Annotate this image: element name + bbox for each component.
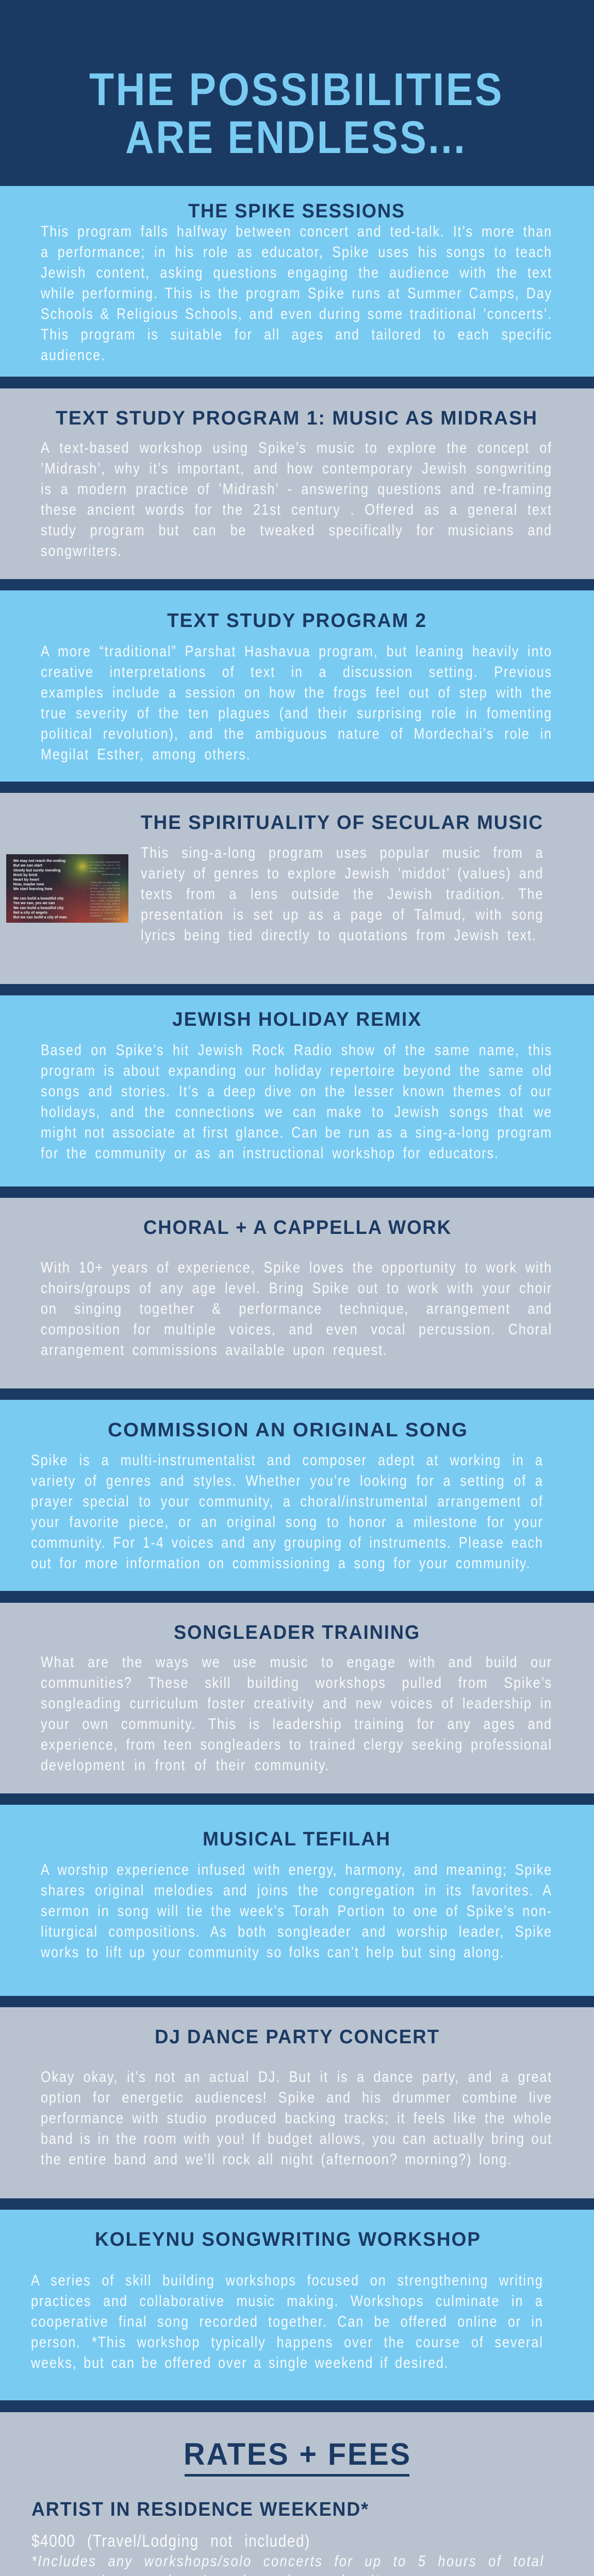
image: talmud-style slide with lyrics: heavens, so that we may (90, 908, 120, 911)
body text: experience, from teen songleaders to trained clergy seeking professional (41, 1736, 552, 1753)
image: talmud-style slide with lyrics: (Genesis 11:3-4) (103, 918, 120, 920)
body text: option for energetic audiences! Spike and his drummer combine live (41, 2089, 552, 2106)
body text: This program is suitable for all ages and tailored to each specific (41, 326, 552, 343)
image: talmud-style slide with lyrics: tower that reaches to the (90, 905, 120, 908)
subheading: artist in residence: ARTIST IN RESIDENCE WEEKEND* (31, 2499, 369, 2520)
title: THE POSSIBILITIES (89, 63, 504, 115)
heading: KOLEYNU SONGWRITING WORKSHOP (95, 2229, 481, 2250)
body text: A text-based workshop using Spike’s music to explore the concept of (41, 439, 552, 456)
image: talmud-style slide with lyrics: said, “Come, let us build (90, 899, 120, 902)
body text: study program but can be tweaked specifically for musicians and (41, 522, 552, 539)
heading: DJ DANCE PARTY CONCERT (155, 2026, 440, 2048)
body text: works to lift up your community so folks can’t help but sing along. (41, 1944, 505, 1961)
body text: might not associate at first glance. Can be run as a sing-a-long program (41, 1124, 552, 1141)
body text: shares original melodies and joins the congregation in its favorites. A (41, 1882, 552, 1899)
heading: MUSICAL TEFILAH (203, 1828, 391, 1850)
image: talmud-style slide with lyrics: Now, maybe now (13, 882, 44, 887)
body text: This program falls halfway between concert and ted-talk. It’s more than (41, 223, 552, 240)
header: title band (0, 0, 594, 186)
image: talmud-style slide with lyrics: We start learning how (13, 887, 53, 891)
body text: performance with studio produced backing tracks; it feels like the whole (41, 2110, 552, 2127)
panel: koleynu songwriting workshop (0, 2210, 594, 2400)
note: artist in residence: *Includes any workshops/solo concerts for up to 5 hours of total (31, 2553, 544, 2570)
image: talmud-style slide with lyrics: But we can start (13, 863, 43, 868)
heading: THE SPIRITUALITY OF SECULAR MUSIC (141, 812, 543, 834)
image: talmud-style slide with lyrics: “It is not your responsibility (90, 861, 120, 863)
panel: songleader training (0, 1603, 594, 1793)
body text (41, 1861, 552, 1961)
image: talmud-style slide with lyrics: Heart by heart (13, 877, 39, 882)
body text: lyrics being tied directly to quotations from Jewish text. (141, 927, 537, 944)
image: talmud-style slide with lyrics: Brick by brick (13, 872, 38, 877)
image: talmud-style slide with lyrics: Not a city of angels (13, 910, 47, 914)
body text: program is about expanding our holiday repertoire beyond the same old (41, 1062, 552, 1079)
heading: COMMISSION AN ORIGINAL SONG (108, 1419, 468, 1441)
body text: variety of genres to explore Jewish ’middot’ (values) and (141, 865, 543, 882)
panel: dj dance party concert (0, 2007, 594, 2198)
image: talmud-style slide with lyrics: ourselves a city, with a (90, 902, 120, 905)
body text: the entire band and we’ll rock all night (afternoon? morning?) long. (41, 2151, 512, 2168)
body text (31, 2272, 543, 2371)
body text: community. For 1-4 voices and any grouping of instruments. Please each (31, 1534, 543, 1551)
body text: variety of genres and styles. Whether you’re looking for a setting of a (31, 1472, 543, 1489)
body text: Schools & Religious Schools, and even during some traditional ’concerts’. (41, 306, 552, 323)
image: talmud-style slide with lyrics: neither are you free to (90, 867, 120, 869)
panel: text study program 2 (0, 590, 594, 782)
image: talmud-style slide with lyrics: make a name for (90, 911, 120, 914)
body text: Based on Spike’s hit Jewish Rock Radio show of the same name, this (41, 1042, 552, 1059)
body text: development in front of their community. (41, 1757, 329, 1774)
body text: person. *This workshop typically happens over the course of several (31, 2334, 543, 2351)
image: talmud-style slide with lyrics: tar for mortar. Then they (90, 896, 120, 899)
body text: band is in the room with you! If budget allows, you can actually bring out (41, 2130, 552, 2147)
body text: liturgical compositions. As both songleader and worship leader, Spike (41, 1923, 552, 1940)
body text (141, 844, 543, 944)
body text: Okay okay, it’s not an actual DJ. But it is a dance party, and a great (41, 2069, 552, 2086)
image: talmud-style slide with lyrics: bricks and bake them (90, 887, 120, 890)
body text: holidays, and the connections we can make to Jewish songs that we (41, 1104, 552, 1121)
body text: audience. (41, 347, 106, 364)
panel: text study program 1 (0, 388, 594, 579)
body text: for the community or as an instructional workshop for educators. (41, 1145, 499, 1162)
body text: prayer special to your community, a choral/instrumental arrangement of (31, 1493, 543, 1510)
body text (41, 1259, 552, 1359)
body text: true severity of the ten plagues (and their surprising role in fomenting (41, 705, 552, 722)
image: talmud-style slide with lyrics: But we can build a city of man (13, 915, 67, 920)
body text: out for more information on commissioning a song for your community. (31, 1555, 531, 1572)
body text: composition for multiple voices, and even vocal percussion. Choral (41, 1321, 552, 1338)
body text (41, 2069, 552, 2168)
image: talmud-style slide with lyrics: (Pirkei Avot 2:16) (102, 873, 121, 875)
image: talmud-style slide with lyrics: brick instead of stone, and (90, 893, 120, 896)
image: talmud-style slide with lyrics: We can build a beautiful city (13, 905, 64, 910)
body text: weeks, but can be offered over a single weekend if desired. (31, 2354, 449, 2371)
panel: commission an original song (0, 1400, 594, 1591)
body text: sermon in song will tie the week’s Torah Portion to one of Spike’s non- (41, 1903, 552, 1920)
body text: your own community. This is leadership training for any ages and (41, 1716, 552, 1733)
body text: A more “traditional” Parshat Hashavua program, but leaning heavily into (41, 643, 552, 660)
body text: communities? These skill building workshops pulled from Spike’s (41, 1674, 552, 1691)
heading: CHORAL + A CAPPELLA WORK (143, 1217, 452, 1239)
body text: ’Midrash’, why it’s important, and how contemporary Jewish songwriting (41, 460, 552, 477)
image: talmud-style slide with lyrics: thoroughly.” They used (90, 890, 120, 893)
body text (41, 223, 552, 364)
body text (41, 1654, 552, 1774)
price: artist in residence: $4000 (Travel/Lodging not included) (31, 2531, 310, 2550)
heading: SONGLEADER TRAINING (174, 1622, 420, 1643)
panel: rates + fees (0, 2412, 594, 2576)
body text: these ancient words for the 21st century . Offered as a general text (41, 501, 552, 518)
heading: JEWISH HOLIDAY REMIX (172, 1009, 422, 1030)
body text: examples include a session on how the frogs feel out of step with the (41, 684, 552, 701)
body text: choirs/groups of any age level. Bring Spike out to work with your choir (41, 1280, 552, 1297)
image: talmud-style slide with lyrics: “Come, let’s make (90, 884, 120, 887)
body text: arrangement commissions available upon request. (41, 1342, 388, 1359)
body text: creative interpretations of text in a discussion setting. Previous (41, 664, 552, 681)
body text (31, 1452, 543, 1572)
body text: songs and stories. It’s a deep dive on the lesser known themes of our (41, 1083, 552, 1100)
body text: your favorite piece, or an original song to honor a milestone for your (31, 1514, 543, 1531)
body text: cooperative final song recorded together. Can be offered online or in (31, 2313, 543, 2330)
image: talmud-style slide with lyrics: to finish the work, but (90, 864, 121, 867)
body text: political revolution), and the ambiguous nature of Mordechai’s role in (41, 725, 552, 742)
body text: Megilat Esther, among others. (41, 746, 251, 763)
image: talmud-style slide with lyrics: Slowly but surely mending (13, 868, 61, 872)
image: talmud-style slide with lyrics: desist from it.” (90, 870, 106, 872)
panel: the spirituality of secular music (0, 793, 594, 984)
body text: songleading curriculum foster creativity and new voices of leadership in (41, 1695, 552, 1712)
body text: while performing. This is the program Spike runs at Summer Camps, Day (41, 285, 552, 302)
image: talmud-style slide with lyrics: ourselves.” (90, 914, 103, 917)
body text (41, 643, 552, 763)
image: talmud-style slide with lyrics (6, 854, 128, 923)
heading: rates + fees: RATES + FEES (184, 2437, 411, 2471)
panel: the spike sessions (0, 186, 594, 377)
body text: texts from a lens outside the Jewish tradition. The (141, 886, 543, 903)
heading: TEXT STUDY PROGRAM 1: MUSIC AS MIDRASH (56, 408, 538, 429)
image: talmud-style slide with lyrics: Yes we can, yes we can (13, 901, 55, 905)
heading underline (185, 2474, 409, 2477)
body text: Jewish content, asking questions engaging the audience with the text (41, 264, 552, 281)
body text: presentation is set up as a page of Talmud, with song (141, 906, 543, 923)
panel: musical tefilah (0, 1805, 594, 1996)
body text: a performance; in his role as educator, Spike uses his songs to teach (41, 244, 552, 261)
body text: What are the ways we use music to engage with and build our (41, 1654, 552, 1671)
body text: With 10+ years of experience, Spike loves the opportunity to work with (41, 1259, 552, 1276)
body text (41, 1042, 552, 1162)
body text: This sing-a-long program uses popular music from a (141, 844, 543, 861)
body text: A worship experience infused with energy, harmony, and meaning; Spike (41, 1861, 552, 1878)
panel: choral + a cappella work (0, 1198, 594, 1388)
body text (41, 439, 552, 560)
heading: THE SPIKE SESSIONS (188, 200, 405, 222)
image: talmud-style slide with lyrics: “They said to each other, (90, 881, 120, 884)
body text: Spike is a multi-instrumentalist and composer adept at working in a (31, 1452, 543, 1469)
body text: songwriters. (41, 543, 122, 560)
heading: TEXT STUDY PROGRAM 2 (167, 610, 427, 632)
image: talmud-style slide with lyrics: We may not reach the ending (13, 858, 65, 863)
body text: is a modern practice of ’Midrash’ - answering questions and re-framing (41, 481, 552, 498)
body text: on singing together & performance technique, arrangement and (41, 1300, 552, 1317)
title: ARE ENDLESS... (125, 111, 467, 163)
image: talmud-style slide with lyrics: We can build a beautiful city (13, 896, 64, 901)
title (89, 63, 504, 163)
panel: jewish holiday remix (0, 995, 594, 1187)
body text: A series of skill building workshops focused on strengthening writing (31, 2272, 543, 2289)
body text: practices and collaborative music making. Workshops culminate in a (31, 2293, 543, 2310)
